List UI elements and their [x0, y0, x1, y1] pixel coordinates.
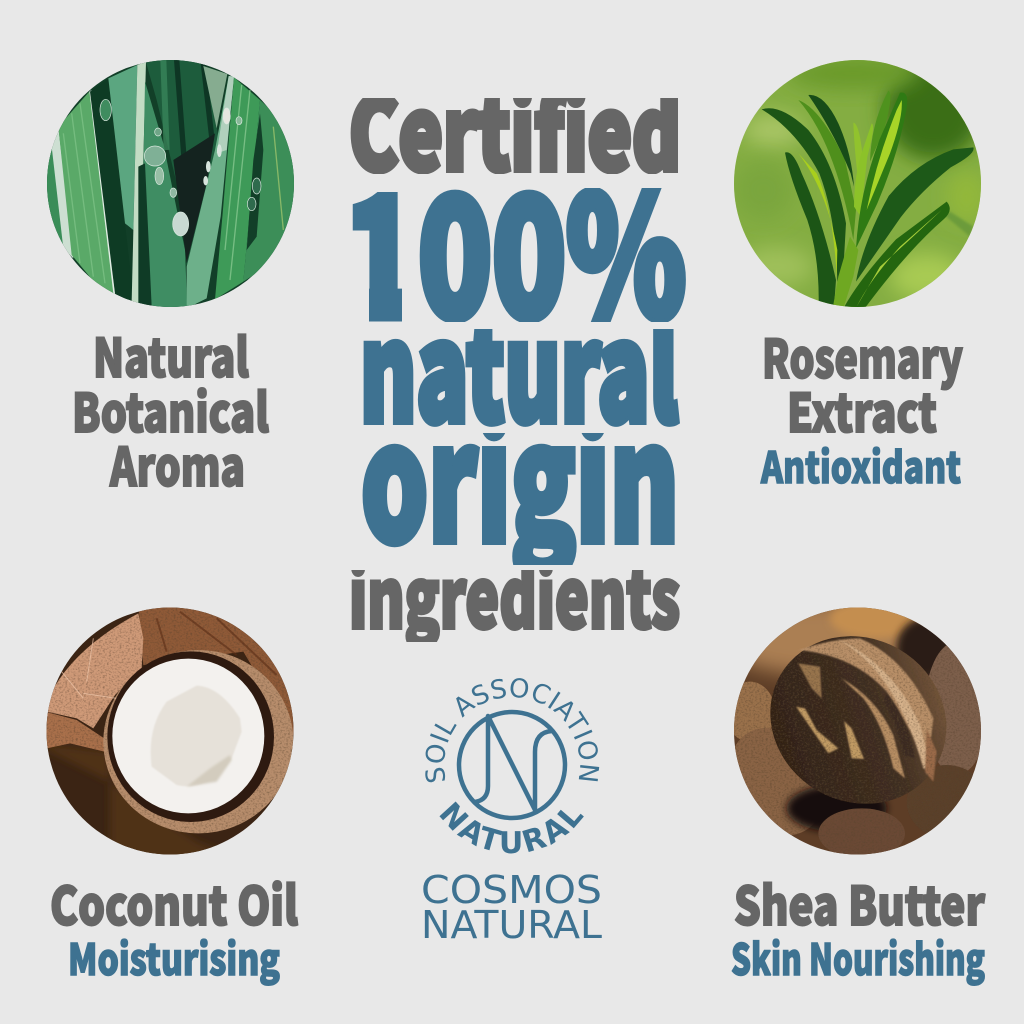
label: Coconut Oil Moisturising: Coconut Oil — [50, 865, 298, 941]
heading: natural: natural — [360, 266, 678, 460]
label: Rosemary Extract Antioxidant: Extract — [787, 372, 937, 448]
logo text: COSMOS NATURAL: NATURAL — [421, 903, 602, 947]
heading: 100%: 100% — [344, 124, 686, 365]
needles — [785, 152, 836, 307]
logo: Soil Association Natural seal — [425, 678, 600, 854]
label: Natural Botanical Aroma — [72, 317, 269, 502]
logo text: COSMOS NATURAL — [421, 868, 602, 947]
photo: rosemary sprig — [734, 60, 981, 307]
label: Natural Botanical Aroma: Botanical — [72, 372, 269, 448]
label: Rosemary Extract Antioxidant — [760, 318, 963, 496]
photo: lemongrass blades with water drops — [47, 60, 294, 307]
label: Shea Butter Skin Nourishing — [731, 865, 985, 988]
heading: 100% — [352, 188, 686, 322]
label: Coconut Oil Moisturising: Moisturising — [68, 926, 280, 988]
label: Natural Botanical Aroma: Natural — [93, 317, 249, 393]
heading: ingredients: ingredients — [349, 533, 680, 652]
label: Rosemary Extract Antioxidant: Antioxidant — [760, 434, 961, 496]
heading: origin: origin — [361, 356, 679, 588]
heading: Certified: Certified — [349, 54, 681, 199]
logo: Soil Association Natural seal: NATURAL — [440, 802, 584, 854]
label: Natural Botanical Aroma: Aroma — [109, 426, 245, 502]
logo: Soil Association Natural seal: SOIL ASSOCIATION — [425, 678, 600, 782]
photo: halved coconut — [46, 608, 294, 854]
photo: shea nuts — [734, 608, 981, 854]
label: Coconut Oil Moisturising — [50, 865, 298, 988]
logo text: COSMOS NATURAL: COSMOS — [421, 868, 602, 912]
